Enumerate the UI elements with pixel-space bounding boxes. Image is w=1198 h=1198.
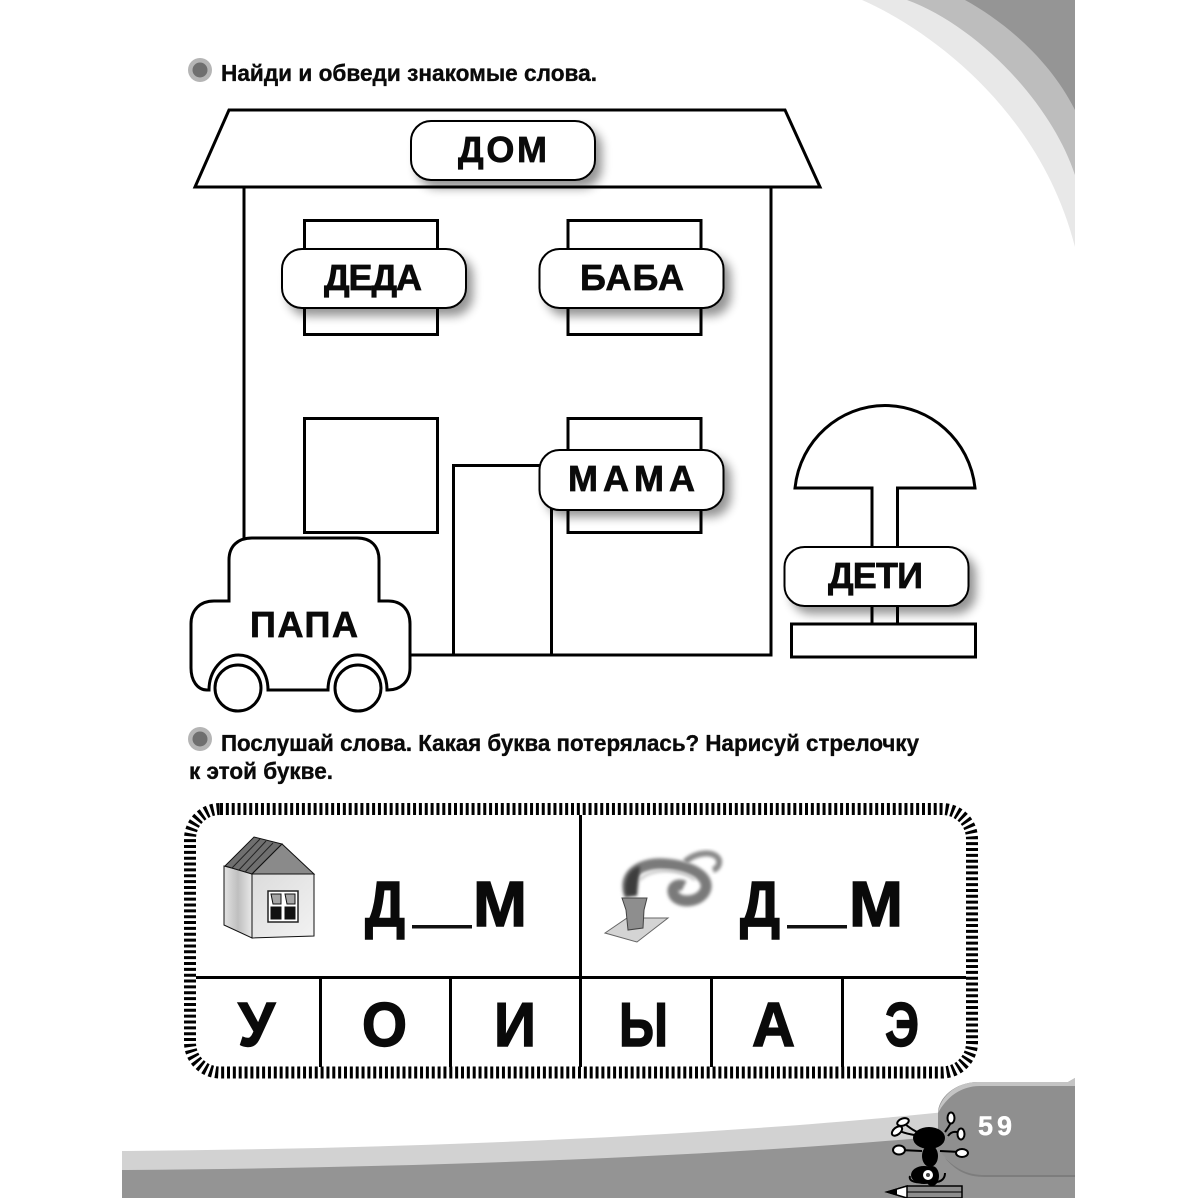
- top-right corner swoosh: [862, 0, 1075, 247]
- dome: [795, 406, 975, 488]
- mushroom shelter: [792, 406, 976, 657]
- sign: ДОМ: ДОМ: [458, 129, 547, 170]
- word with gap: smoke: Д: [740, 868, 780, 940]
- icon: chimney with smoke: [605, 853, 719, 942]
- letter choices: Э: [885, 991, 919, 1060]
- letter choices: О: [362, 991, 407, 1060]
- word with gap: house: [365, 868, 527, 940]
- heading: listen to the words: к этой букве.: [189, 758, 333, 784]
- bottom band: [122, 1112, 1075, 1198]
- word with gap: house: Д: [365, 868, 405, 940]
- letter choices: А: [752, 991, 795, 1060]
- sign: МАМА: [540, 450, 731, 517]
- sign: ДОМ: [411, 121, 602, 188]
- window lower right: [568, 418, 701, 532]
- pencil: [887, 1186, 962, 1198]
- bullet: first task: [188, 58, 212, 82]
- window lower left: [304, 418, 438, 532]
- window upper right: [568, 220, 701, 334]
- car: [191, 538, 410, 711]
- word with gap: smoke: М: [849, 868, 903, 940]
- door: [454, 466, 552, 655]
- heading: listen to the words: Послушай слова. Какая буква потерялась? Нарисуй стрелочку: [221, 730, 919, 756]
- house window: [268, 891, 298, 922]
- window upper left: [304, 220, 438, 334]
- house body: [244, 187, 771, 655]
- wheel right: [335, 665, 381, 711]
- icon: house: [224, 837, 314, 938]
- sign: ДЕТИ: [784, 547, 976, 614]
- page number: 59: [978, 1111, 1012, 1141]
- page number tab: [938, 1078, 1075, 1177]
- word with gap: smoke: [740, 868, 903, 940]
- grid lines: [196, 815, 966, 1067]
- heading: find and circle words: Найди и обведи знакомые слова.: [221, 60, 597, 86]
- sign: БАБА: БАБА: [580, 257, 684, 298]
- base: [792, 624, 976, 657]
- letter choices: Ы: [619, 991, 668, 1060]
- letter choices: У: [238, 991, 276, 1060]
- heading: listen to the words: [189, 730, 919, 784]
- letter choices: И: [494, 991, 536, 1060]
- sign: ДЕДА: [282, 249, 473, 316]
- sign: МАМА: МАМА: [568, 458, 695, 499]
- dashed frame: [190, 809, 972, 1072]
- word with gap: house: М: [473, 868, 527, 940]
- roof: [195, 110, 820, 187]
- sign: ДЕТИ: ДЕТИ: [828, 555, 923, 596]
- wheel left: [215, 665, 261, 711]
- car label: ПАПА: [250, 604, 358, 645]
- house scene: [195, 110, 820, 655]
- letter choices: [238, 991, 919, 1060]
- sign: ДЕДА: ДЕДА: [324, 257, 422, 298]
- icon: ant on pencil mascot: [887, 1112, 968, 1198]
- panel: letter exercise: [190, 809, 972, 1072]
- stem: [872, 488, 898, 624]
- sign: БАБА: [540, 249, 731, 316]
- bullet: second task: [188, 727, 212, 751]
